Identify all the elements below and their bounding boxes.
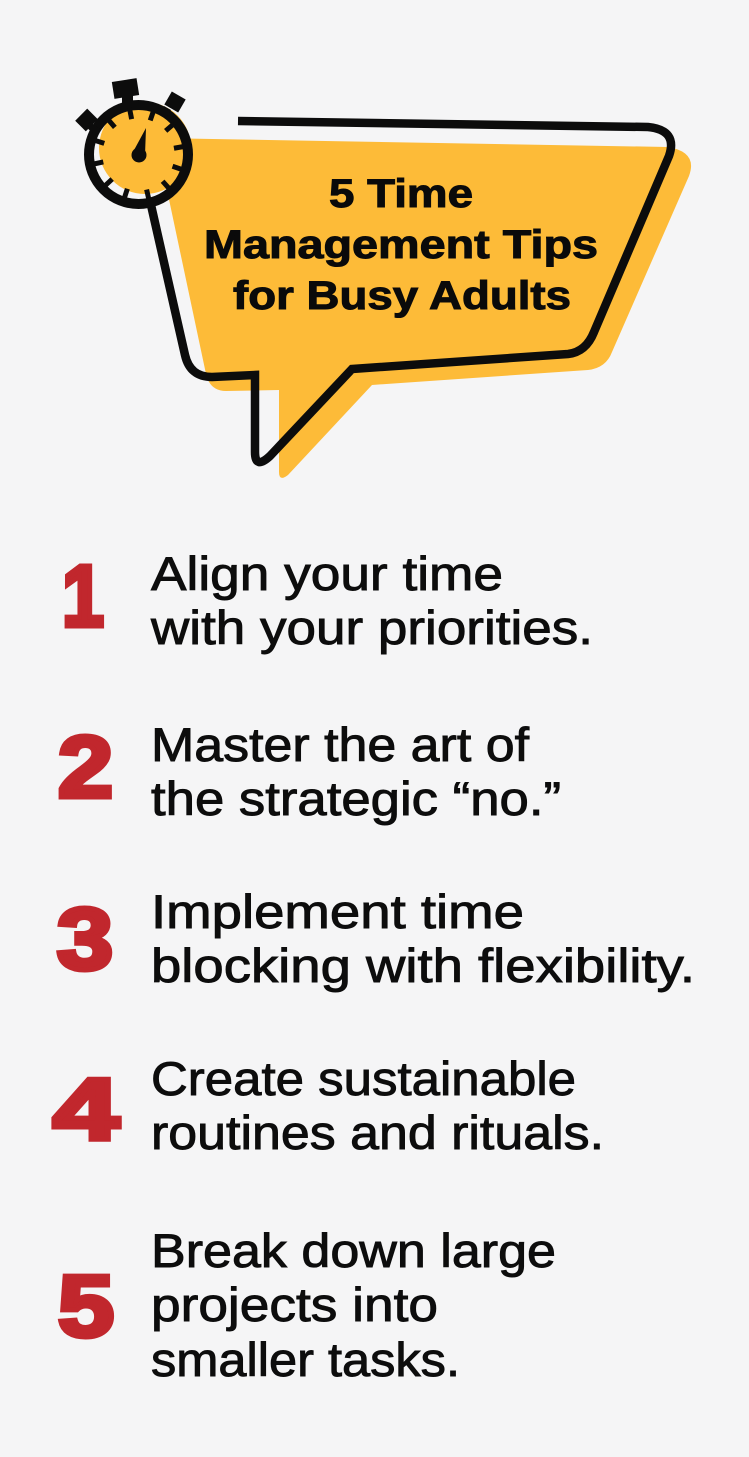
black bubble outline <box>151 121 671 462</box>
number 4: 4 <box>53 1061 119 1158</box>
tip 5 <box>58 1224 556 1386</box>
number 1: 1 <box>62 548 104 645</box>
tip 2 <box>58 718 561 825</box>
tip 2 text: the strategic “no.” <box>151 772 561 825</box>
tip 4 text <box>151 1052 604 1159</box>
number 5: 5 <box>58 1258 114 1355</box>
header speech bubble <box>75 78 691 478</box>
tip 5 text: Break down large <box>151 1224 556 1277</box>
number 2: 2 <box>58 719 113 816</box>
title: 5 Time <box>329 172 473 216</box>
number 3: 3 <box>57 891 113 988</box>
tip 2 text <box>151 718 561 825</box>
tip 3 <box>57 885 695 992</box>
tip 4 text: Create sustainable <box>151 1052 576 1105</box>
tip 3 text: blocking with flexibility. <box>151 939 695 992</box>
tip 3 text: Implement time <box>151 885 524 938</box>
title <box>204 172 598 318</box>
tip 5 text: smaller tasks. <box>151 1333 460 1386</box>
title: for Busy Adults <box>233 274 571 318</box>
tip 5 text: projects into <box>151 1278 438 1331</box>
tip 3 text <box>151 885 695 992</box>
tip 4 <box>53 1052 604 1159</box>
tip 1 text: with your priorities. <box>150 601 593 654</box>
tip 2 text: Master the art of <box>151 718 530 771</box>
yellow bubble fill <box>156 138 691 478</box>
tip 5 text <box>151 1224 556 1386</box>
tip 1 text <box>150 547 593 654</box>
tip 4 text: routines and rituals. <box>151 1106 604 1159</box>
tip 1 <box>62 547 593 654</box>
title: Management Tips <box>204 223 598 267</box>
icon: stopwatch <box>75 78 191 204</box>
tip 1 text: Align your time <box>151 547 503 600</box>
